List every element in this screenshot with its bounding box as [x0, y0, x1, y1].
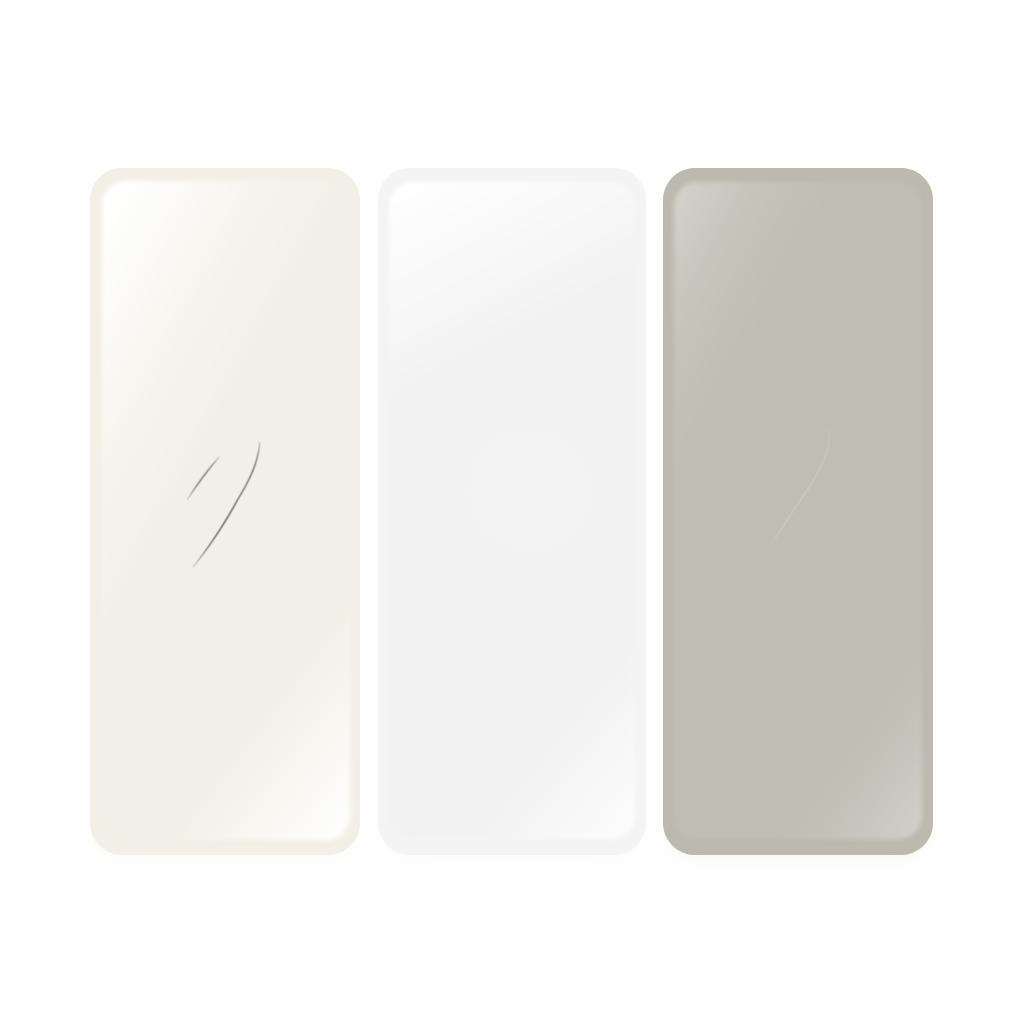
panel: cream swatch: [90, 168, 360, 860]
panel: white swatch: [378, 168, 646, 860]
white swatch inner face: [392, 184, 469, 225]
swatch comparison graphic: [90, 168, 933, 855]
taupe swatch hair scratch: [768, 428, 830, 548]
panel: taupe swatch: [663, 168, 933, 860]
cream swatch hair scratches: [187, 442, 260, 567]
taupe swatch inner face: [668, 175, 928, 845]
cream swatch inner face: [96, 174, 354, 846]
